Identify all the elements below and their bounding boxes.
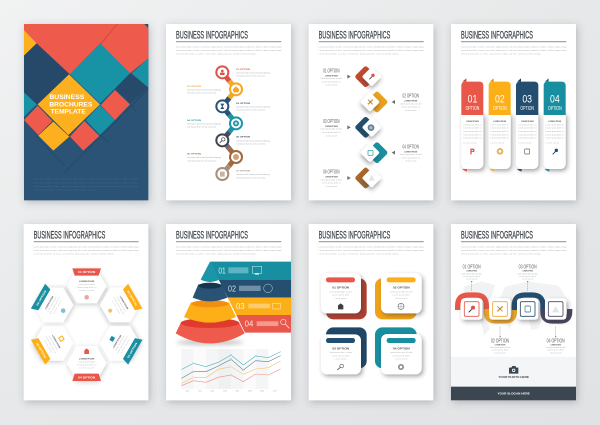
column 2: Lorem ipsum dolor sit <box>491 133 509 136</box>
option labels: 05 OPTION <box>236 137 251 139</box>
option descriptions: Lorem ipsum dolor sit amet consectetur <box>187 126 217 129</box>
option text: LOREM IPSUM <box>404 101 418 103</box>
intro text <box>461 246 566 256</box>
step circle 4 <box>229 116 243 130</box>
band 04 label: 04 <box>245 319 254 329</box>
intro text: Lorem ipsum dolor sit amet, consectetur adipiscing elit, sed do eiusmod tempor incididunt ut labore et dolore magna aliqua <box>461 249 566 252</box>
card 4: Lorem ipsum dolor sit amet <box>390 351 413 354</box>
line chart: 2011 <box>198 391 202 393</box>
option text: Lorem ipsum <box>326 135 338 137</box>
band 01 label: 01 <box>218 266 226 276</box>
option descriptions: Lorem ipsum dolor sit amet consectetur <box>187 92 217 95</box>
column 3: OPTION <box>520 106 534 112</box>
photo placeholder band: YOUR PHOTO HERE <box>498 376 529 379</box>
step box 2 <box>489 298 511 320</box>
intro text <box>176 246 281 256</box>
column 1: Lorem ipsum dolor sit <box>463 133 482 136</box>
option 2 label: LOREM IPSUM <box>495 344 506 346</box>
column 3: LOREM IPSUM <box>521 121 534 123</box>
option headings: 04 OPTION <box>402 144 419 150</box>
column 1: Lorem ipsum dolor sit <box>463 127 482 130</box>
column 1: Lorem ipsum <box>463 142 477 144</box>
card 1 <box>321 273 367 319</box>
intro text: Lorem ipsum dolor sit amet, consectetur adipiscing elit, sed do eiusmod tempor incididunt ut labore et dolore magna aliqua <box>176 46 281 49</box>
column 1 <box>461 78 483 172</box>
hexagon 4 bottom: 04 OPTION <box>78 375 95 379</box>
option labels: 04 OPTION <box>187 119 202 122</box>
column 2: OPTION <box>493 106 507 112</box>
panel: four option columns <box>451 24 576 200</box>
column 3: Lorem ipsum dolor sit <box>518 127 537 130</box>
option descriptions: Lorem ipsum dolor sit amet consectetur adipiscing <box>236 139 270 142</box>
column 2: Lorem ipsum dolor sit <box>491 127 509 130</box>
option labels: 02 OPTION <box>187 86 202 88</box>
column 4: LOREM IPSUM <box>548 121 562 123</box>
option 1 label <box>462 265 482 281</box>
column 2: Lorem ipsum dolor sit <box>491 123 509 126</box>
hexagon 5 left bottom: Lorem ipsum dolor <box>48 336 58 352</box>
card 4: 04 OPTION <box>393 346 410 350</box>
cover title <box>49 94 92 116</box>
option labels: 07 OPTION <box>236 171 251 173</box>
column 2: Lorem ipsum <box>491 142 505 144</box>
intro text: Lorem ipsum dolor sit amet, consectetur adipiscing elit, sed do eiusmod tempor incididunt ut labore et dolore magna aliqua <box>461 246 566 249</box>
cover body text: Lorem ipsum dolor sit amet, consectetur adipiscing elit, sed do eiusmod tempor incididunt ut labore et dolore <box>33 178 138 181</box>
step box 3 <box>517 298 538 320</box>
hexagon 6 left top: Lorem ipsum dolor sit <box>48 296 61 315</box>
option descriptions: Lorem ipsum dolor sit amet consectetur <box>236 143 266 146</box>
column 4: OPTION <box>548 106 562 112</box>
arrows <box>347 75 395 180</box>
cover title: BROCHURES <box>49 101 92 108</box>
column 4: 04 <box>550 94 560 106</box>
card 4: Lorem ipsum <box>395 359 408 361</box>
line chart: 2013 <box>223 391 227 393</box>
option 3 label: Lorem ipsum dolor sit amet <box>518 272 538 275</box>
option descriptions: Lorem ipsum dolor sit amet consectetur <box>236 109 266 112</box>
column 2 <box>489 78 511 172</box>
intro text: Lorem ipsum dolor sit amet, consectetur adipiscing elit, sed do eiusmod tempor incididunt ut labore et dolore magna aliqua <box>34 246 139 249</box>
column 4: Lorem ipsum dolor sit <box>546 133 564 136</box>
slogan footer bar: YOUR SLOGAN HERE <box>497 393 530 396</box>
intro text: Lorem ipsum dolor sit amet, consectetur adipiscing elit, sed do eiusmod tempor <box>319 53 399 56</box>
intro text: Lorem ipsum dolor sit amet, consectetur adipiscing elit, sed do eiusmod tempor <box>319 253 399 256</box>
ribbon connector <box>458 295 570 321</box>
option 2 label: Lorem ipsum <box>494 352 506 354</box>
option headings: 02 OPTION <box>402 94 419 100</box>
option 2 label: Lorem ipsum dolor <box>492 350 509 352</box>
hexagon 2 right top <box>95 279 145 331</box>
option headings: 01 OPTION <box>323 68 339 74</box>
cover title: BUSINESS <box>49 94 84 101</box>
step circle 6 <box>229 150 243 164</box>
line chart: 2012 <box>210 391 214 393</box>
diamond step 5 <box>354 167 382 189</box>
option text: LOREM IPSUM <box>325 75 338 77</box>
hexagon 5 left bottom: LOREM IPSUM <box>51 335 60 349</box>
option text: Lorem ipsum <box>326 85 338 87</box>
line chart: 2015 <box>248 391 252 393</box>
card 3: Lorem ipsum dolor sit amet <box>329 351 353 354</box>
option 2 label <box>490 339 511 354</box>
hexagon 2 right top: LOREM IPSUM <box>119 296 128 310</box>
card 2: Lorem ipsum dolor sit amet <box>390 290 413 293</box>
column 3: Lorem ipsum dolor sit <box>518 123 537 126</box>
option 4 label: Lorem ipsum dolor sit amet <box>546 346 566 349</box>
option text: LOREM IPSUM <box>404 151 418 153</box>
cover body text: Lorem ipsum dolor sit amet, consectetur adipiscing elit, sed do eiusmod tempor incididunt ut labore et dolore <box>33 181 138 184</box>
hexagon 3 right bottom: Lorem ipsum dolor <box>115 335 126 351</box>
option descriptions: Lorem ipsum dolor sit amet consectetur adipiscing <box>236 105 270 108</box>
option descriptions: Lorem ipsum dolor sit amet consectetur <box>236 75 266 78</box>
hexagon 2 right top: 02 OPTION <box>126 289 138 307</box>
option 2 label: 02 OPTION <box>491 339 509 345</box>
hexagon 5 left bottom: Lorem ipsum dolor sit <box>45 336 57 354</box>
diamond step 4 <box>360 141 388 164</box>
hexagon 4 bottom: Lorem ipsum <box>79 367 95 369</box>
panel: vertical circle timeline <box>166 24 291 200</box>
option text: Lorem ipsum dolor sit <box>401 106 421 109</box>
panel: cover page <box>24 24 148 200</box>
timeline connectors <box>222 72 236 174</box>
card 4 <box>375 327 422 374</box>
intro text <box>176 46 281 56</box>
hexagon 2 right top: Lorem ipsum <box>111 301 121 315</box>
step circle 1 <box>215 65 229 79</box>
heading: BUSINESS INFOGRAPHICS <box>319 229 390 241</box>
diamond step 3 <box>354 116 382 139</box>
option labels: 03 OPTION <box>236 103 251 105</box>
intro text <box>319 46 424 56</box>
option descriptions <box>187 71 270 179</box>
hexagon 3 right bottom: 03 OPTION <box>126 342 138 359</box>
card 3: Lorem ipsum dolor <box>332 355 350 357</box>
hexagon 1 top: 01 OPTION <box>78 270 95 274</box>
option descriptions: Lorem ipsum dolor sit amet consectetur <box>236 176 266 179</box>
column 3: Lorem ipsum dolor sit <box>518 130 537 133</box>
option text: Lorem ipsum dolor sit <box>322 80 341 83</box>
option 3 label: Lorem ipsum <box>522 279 534 281</box>
intro text <box>461 46 566 56</box>
band 02 label: 02 <box>228 283 236 293</box>
option text: Lorem ipsum dolor sit amet <box>321 128 343 131</box>
column 3: Lorem ipsum dolor sit <box>518 133 537 136</box>
column 4: Lorem ipsum dolor sit <box>546 137 564 140</box>
option 4 label <box>546 339 566 354</box>
hexagon 5 left bottom: Lorem ipsum <box>43 340 53 354</box>
option labels: 06 OPTION <box>187 154 202 156</box>
option headings: 06 OPTION <box>323 170 339 176</box>
intro text <box>319 246 424 256</box>
line chart: 2010 <box>185 391 189 393</box>
card 3: Lorem ipsum <box>335 359 347 361</box>
hexagon 6 left top: LOREM IPSUM <box>45 296 55 310</box>
hexagon 1 top: Lorem ipsum dolor sit <box>77 286 97 289</box>
hexagon 3 right bottom <box>95 317 145 369</box>
panel: world map process <box>451 224 576 400</box>
intro text: Lorem ipsum dolor sit amet, consectetur adipiscing elit, sed do eiusmod tempor <box>461 53 541 56</box>
column 3: Lorem ipsum dolor sit <box>518 137 537 140</box>
hexagon 2 right top: Lorem ipsum dolor <box>116 297 126 313</box>
option headings: 03 OPTION <box>323 119 339 125</box>
heading: BUSINESS INFOGRAPHICS <box>34 229 105 241</box>
hexagon 5 left bottom <box>28 317 78 369</box>
option text: Lorem ipsum <box>326 186 338 188</box>
card 1: 01 OPTION <box>332 286 349 290</box>
column 2: 02 <box>495 94 505 106</box>
line chart: 2016 <box>260 391 264 393</box>
option headings <box>323 68 419 176</box>
option text: Lorem ipsum dolor sit <box>401 156 421 159</box>
option descriptions: Lorem ipsum dolor sit amet consectetur adipiscing <box>187 122 221 125</box>
option 4 label: Lorem ipsum dolor <box>547 350 564 352</box>
option descriptions: Lorem ipsum dolor sit amet consectetur <box>187 159 217 162</box>
card 2: 02 OPTION <box>393 286 410 290</box>
hexagon 1 top: LOREM IPSUM <box>79 281 94 283</box>
option descriptions: Lorem ipsum dolor sit amet consectetur adipiscing <box>236 173 270 176</box>
option 3 label: 03 OPTION <box>519 265 537 271</box>
card 4: Lorem ipsum dolor <box>393 355 410 357</box>
column 1: 01 <box>468 94 477 106</box>
card 2: Lorem ipsum dolor <box>393 295 410 297</box>
step circle 2 <box>229 82 243 96</box>
hexagon 4 bottom: LOREM IPSUM <box>79 358 94 360</box>
step circle 3 <box>215 99 229 113</box>
hexagon 6 left top: Lorem ipsum dolor <box>47 296 58 312</box>
option text: Lorem ipsum <box>405 161 417 163</box>
option 2 label: Lorem ipsum dolor sit amet <box>490 346 511 349</box>
card 1: Lorem ipsum dolor <box>332 295 350 297</box>
intro text: Lorem ipsum dolor sit amet, consectetur adipiscing elit, sed do eiusmod tempor incididunt ut labore et dolore magna aliqua <box>319 246 424 249</box>
line chart <box>181 349 281 393</box>
intro text: Lorem ipsum dolor sit amet, consectetur adipiscing elit, sed do eiusmod tempor incididunt ut labore et dolore magna aliqua <box>319 249 424 252</box>
option text: Lorem ipsum dolor sit <box>322 182 341 185</box>
option text: Lorem ipsum dolor sit amet <box>400 153 422 156</box>
heading: BUSINESS INFOGRAPHICS <box>461 229 533 241</box>
option 1 label: LOREM IPSUM <box>466 271 478 273</box>
world map <box>463 282 567 336</box>
card 2: Lorem ipsum <box>395 298 408 300</box>
card 2 <box>375 273 422 319</box>
hexagon 6 left top: Lorem ipsum <box>53 300 63 314</box>
band 03 label: 03 <box>236 301 245 311</box>
hexagon 4 bottom: Lorem ipsum dolor <box>78 361 95 363</box>
panel: diamond steps <box>309 24 433 200</box>
diamond step 1 <box>354 65 382 88</box>
option text: Lorem ipsum dolor sit amet <box>321 178 343 181</box>
hexagon 3 right bottom: Lorem ipsum <box>121 339 130 353</box>
heading: BUSINESS INFOGRAPHICS <box>319 29 390 41</box>
option text <box>321 75 422 188</box>
intro text: Lorem ipsum dolor sit amet, consectetur adipiscing elit, sed do eiusmod tempor <box>34 253 114 256</box>
heading: BUSINESS INFOGRAPHICS <box>176 29 248 41</box>
column 3: Lorem ipsum <box>518 142 532 144</box>
card 3 <box>321 327 367 374</box>
option text: Lorem ipsum dolor sit <box>322 131 341 134</box>
heading: BUSINESS INFOGRAPHICS <box>461 29 533 41</box>
column 1: Lorem ipsum dolor sit <box>463 130 482 133</box>
intro text: Lorem ipsum dolor sit amet, consectetur adipiscing elit, sed do eiusmod tempor incididunt ut labore et dolore magna aliqua <box>319 46 424 49</box>
intro text: Lorem ipsum dolor sit amet, consectetur adipiscing elit, sed do eiusmod tempor incididunt ut labore et dolore magna aliqua <box>319 49 424 52</box>
step circle 5 <box>215 133 229 147</box>
intro text <box>34 246 139 256</box>
intro text: Lorem ipsum dolor sit amet, consectetur adipiscing elit, sed do eiusmod tempor incididunt ut labore et dolore magna aliqua <box>176 246 281 249</box>
hexagon 3 right bottom: Lorem ipsum dolor sit <box>116 335 129 354</box>
intro text: Lorem ipsum dolor sit amet, consectetur adipiscing elit, sed do eiusmod tempor <box>176 253 256 256</box>
hexagon 4 bottom <box>67 346 107 381</box>
photo placeholder band <box>451 357 576 387</box>
pyramid cone <box>176 262 245 345</box>
hexagon 2 right top: Lorem ipsum dolor sit <box>113 297 125 315</box>
option 1 label: Lorem ipsum dolor sit amet <box>462 272 482 275</box>
column 4: Lorem ipsum dolor sit <box>546 127 564 130</box>
hexagon 6 left top: 06 OPTION <box>35 289 47 307</box>
hexagon 4 bottom: Lorem ipsum dolor sit <box>77 363 97 366</box>
step box 1 <box>461 298 482 320</box>
intro text: Lorem ipsum dolor sit amet, consectetur adipiscing elit, sed do eiusmod tempor incididunt ut labore et dolore magna aliqua <box>461 46 566 49</box>
slogan footer bar <box>451 387 576 400</box>
option 3 label: Lorem ipsum dolor <box>519 276 536 278</box>
option 4 label: Lorem ipsum <box>550 352 562 354</box>
intro text: Lorem ipsum dolor sit amet, consectetur adipiscing elit, sed do eiusmod tempor incididunt ut labore et dolore magna aliqua <box>176 249 281 252</box>
intro text: Lorem ipsum dolor sit amet, consectetur adipiscing elit, sed do eiusmod tempor incididunt ut labore et dolore magna aliqua <box>461 49 566 52</box>
option descriptions: Lorem ipsum dolor sit amet consectetur adipiscing <box>187 156 221 159</box>
option 3 label: LOREM IPSUM <box>522 271 534 273</box>
pyramid option bands <box>210 262 291 333</box>
step circle 7 <box>215 167 229 181</box>
cover: geometric diamonds <box>24 24 148 172</box>
cover body text: Lorem ipsum dolor sit amet, consectetur adipiscing elit, sed do eiusmod tempor incididunt ut labore et dolore <box>33 185 138 188</box>
cover title: TEMPLATE <box>51 109 86 116</box>
column 4 <box>544 78 566 172</box>
option descriptions: Lorem ipsum dolor sit amet consectetur adipiscing <box>236 71 270 74</box>
hexagon 1 top <box>67 268 107 303</box>
panel: pyramid and line chart <box>166 224 291 400</box>
panel: hexagon ring <box>24 224 148 400</box>
option 4 label: 04 OPTION <box>547 339 565 345</box>
band 03 label <box>236 301 281 311</box>
step box 4 <box>545 298 566 320</box>
option 1 label: Lorem ipsum dolor <box>463 276 480 278</box>
option text: Lorem ipsum dolor sit amet <box>321 77 343 80</box>
card 3: 03 OPTION <box>332 346 349 350</box>
option text: LOREM IPSUM <box>325 177 338 179</box>
line chart: 2014 <box>235 391 239 393</box>
column 4: Lorem ipsum dolor sit <box>546 130 564 133</box>
option text: Lorem ipsum dolor sit amet <box>400 102 422 105</box>
column 4: Lorem ipsum dolor sit <box>546 123 564 126</box>
column 2: Lorem ipsum dolor sit <box>491 130 509 133</box>
option text: LOREM IPSUM <box>325 126 338 128</box>
intro text: Lorem ipsum dolor sit amet, consectetur adipiscing elit, sed do eiusmod tempor <box>461 253 541 256</box>
cover body text <box>33 178 138 192</box>
column 1: LOREM IPSUM <box>466 121 479 123</box>
option labels <box>187 69 251 173</box>
dashed connectors <box>471 281 556 337</box>
option text: Lorem ipsum <box>405 110 417 112</box>
hexagon 1 top: Lorem ipsum <box>79 290 95 292</box>
intro text: Lorem ipsum dolor sit amet, consectetur adipiscing elit, sed do eiusmod tempor incididunt ut labore et dolore magna aliqua <box>176 49 281 52</box>
heading: BUSINESS INFOGRAPHICS <box>176 229 248 241</box>
option 1 label: 01 OPTION <box>463 265 481 271</box>
band 04 label <box>245 319 289 329</box>
column 4: Lorem ipsum <box>546 142 560 144</box>
column 3: 03 <box>522 94 532 106</box>
column 1: OPTION <box>466 106 479 112</box>
intro text: Lorem ipsum dolor sit amet, consectetur adipiscing elit, sed do eiusmod tempor <box>176 53 256 56</box>
option 3 label <box>518 265 538 281</box>
hexagon 3 right bottom: LOREM IPSUM <box>113 335 122 349</box>
column 1: Lorem ipsum dolor sit <box>463 123 482 126</box>
option 1 label: Lorem ipsum <box>466 279 478 281</box>
column 2: Lorem ipsum dolor sit <box>491 137 509 140</box>
band 02 label <box>228 283 272 293</box>
band 01 label <box>218 266 262 276</box>
column 3 <box>516 78 538 172</box>
column 1: Lorem ipsum dolor sit <box>463 137 482 140</box>
option descriptions: Lorem ipsum dolor sit amet consectetur adipiscing <box>187 88 221 91</box>
hexagon 5 left bottom: 05 OPTION <box>35 342 47 359</box>
option labels: 01 OPTION <box>236 69 251 71</box>
column 2: LOREM IPSUM <box>493 121 507 123</box>
hexagon 6 left top <box>28 279 78 331</box>
line chart: 2017 <box>273 391 277 393</box>
hexagon 1 top: Lorem ipsum dolor <box>78 284 95 286</box>
card 1: Lorem ipsum <box>335 298 347 300</box>
card 1: Lorem ipsum dolor sit amet <box>329 290 353 293</box>
intro text: Lorem ipsum dolor sit amet, consectetur adipiscing elit, sed do eiusmod tempor incididunt ut labore et dolore magna aliqua <box>34 249 139 252</box>
diamond step 2 <box>360 91 388 113</box>
cover body text: Lorem ipsum dolor sit amet, consectetur adipiscing elit <box>33 189 97 192</box>
panel: four rounded cards <box>309 224 433 400</box>
option 4 label: LOREM IPSUM <box>550 344 562 346</box>
